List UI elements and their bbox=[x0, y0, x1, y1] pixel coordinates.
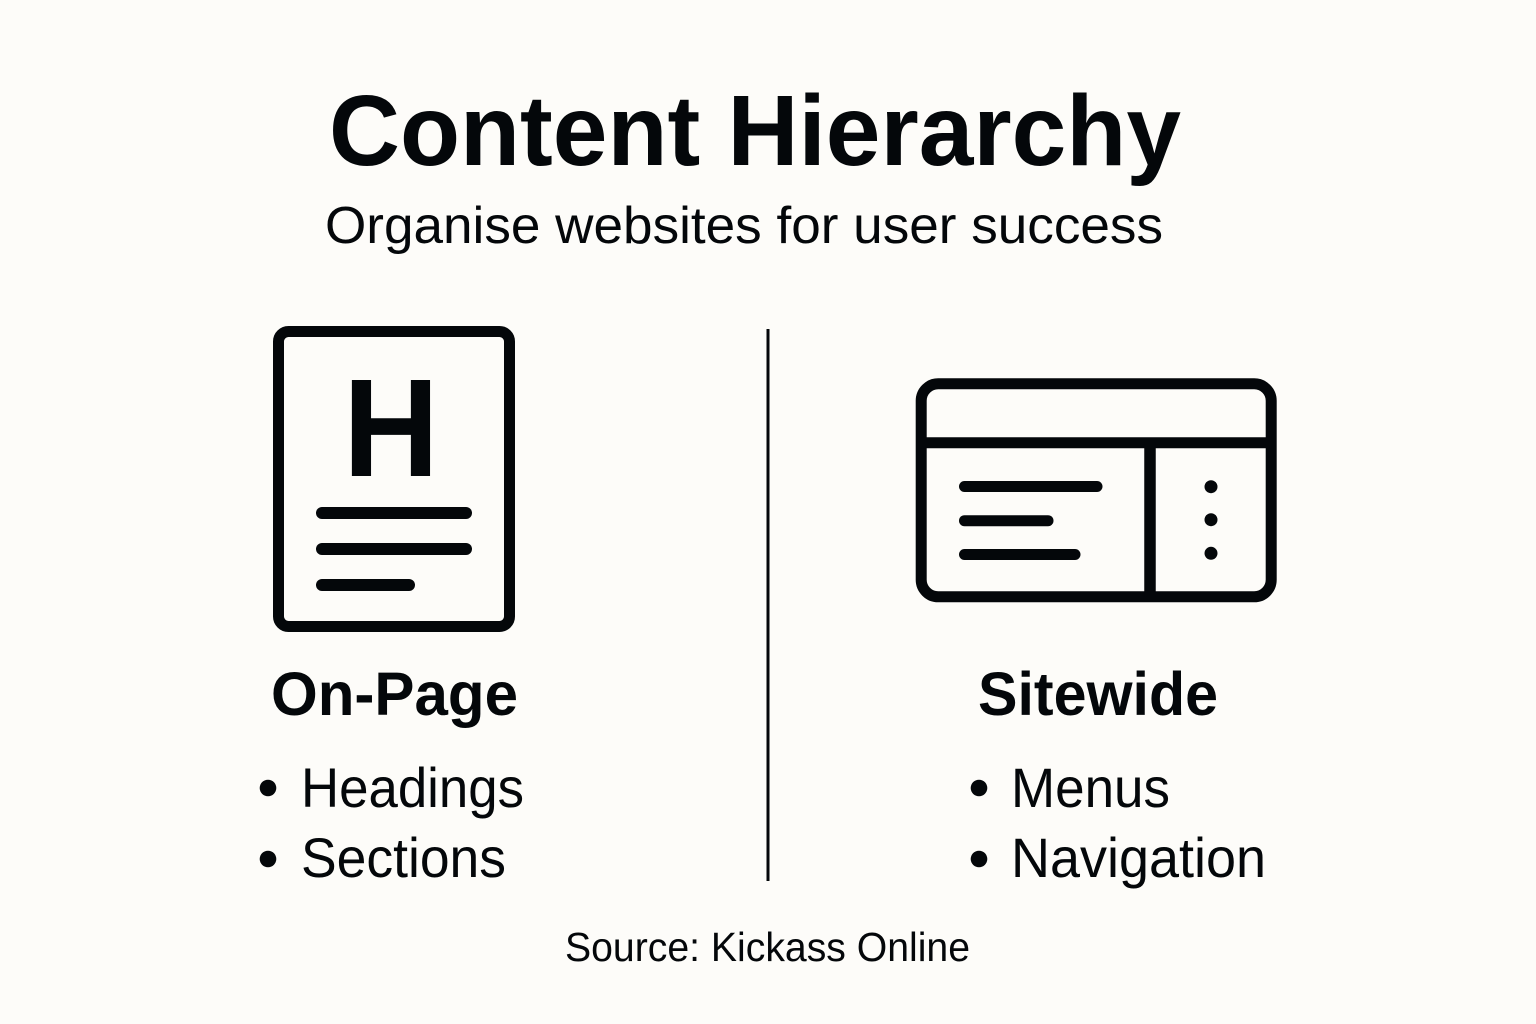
subtitle: Organise websites for user success bbox=[325, 197, 1163, 255]
on-page heading: On-Page bbox=[271, 660, 518, 728]
on-page list: Headings bbox=[301, 756, 524, 819]
icon: site layout wireframe bbox=[921, 384, 1271, 597]
centre divider bbox=[766, 329, 770, 881]
icon: document with heading: H bbox=[343, 350, 439, 506]
on-page list bbox=[260, 756, 524, 889]
panel: sitewide bbox=[921, 384, 1271, 889]
sitewide heading: Sitewide bbox=[978, 660, 1218, 728]
source note: Source: Kickass Online bbox=[565, 924, 970, 970]
sitewide list: Navigation bbox=[1011, 826, 1266, 889]
icon: document with heading bbox=[278, 332, 510, 626]
panel: on-page bbox=[260, 332, 524, 889]
on-page list: Sections bbox=[301, 826, 506, 889]
sitewide list: Menus bbox=[1011, 756, 1170, 819]
title: Content Hierarchy bbox=[329, 75, 1181, 187]
sitewide list bbox=[971, 756, 1266, 889]
